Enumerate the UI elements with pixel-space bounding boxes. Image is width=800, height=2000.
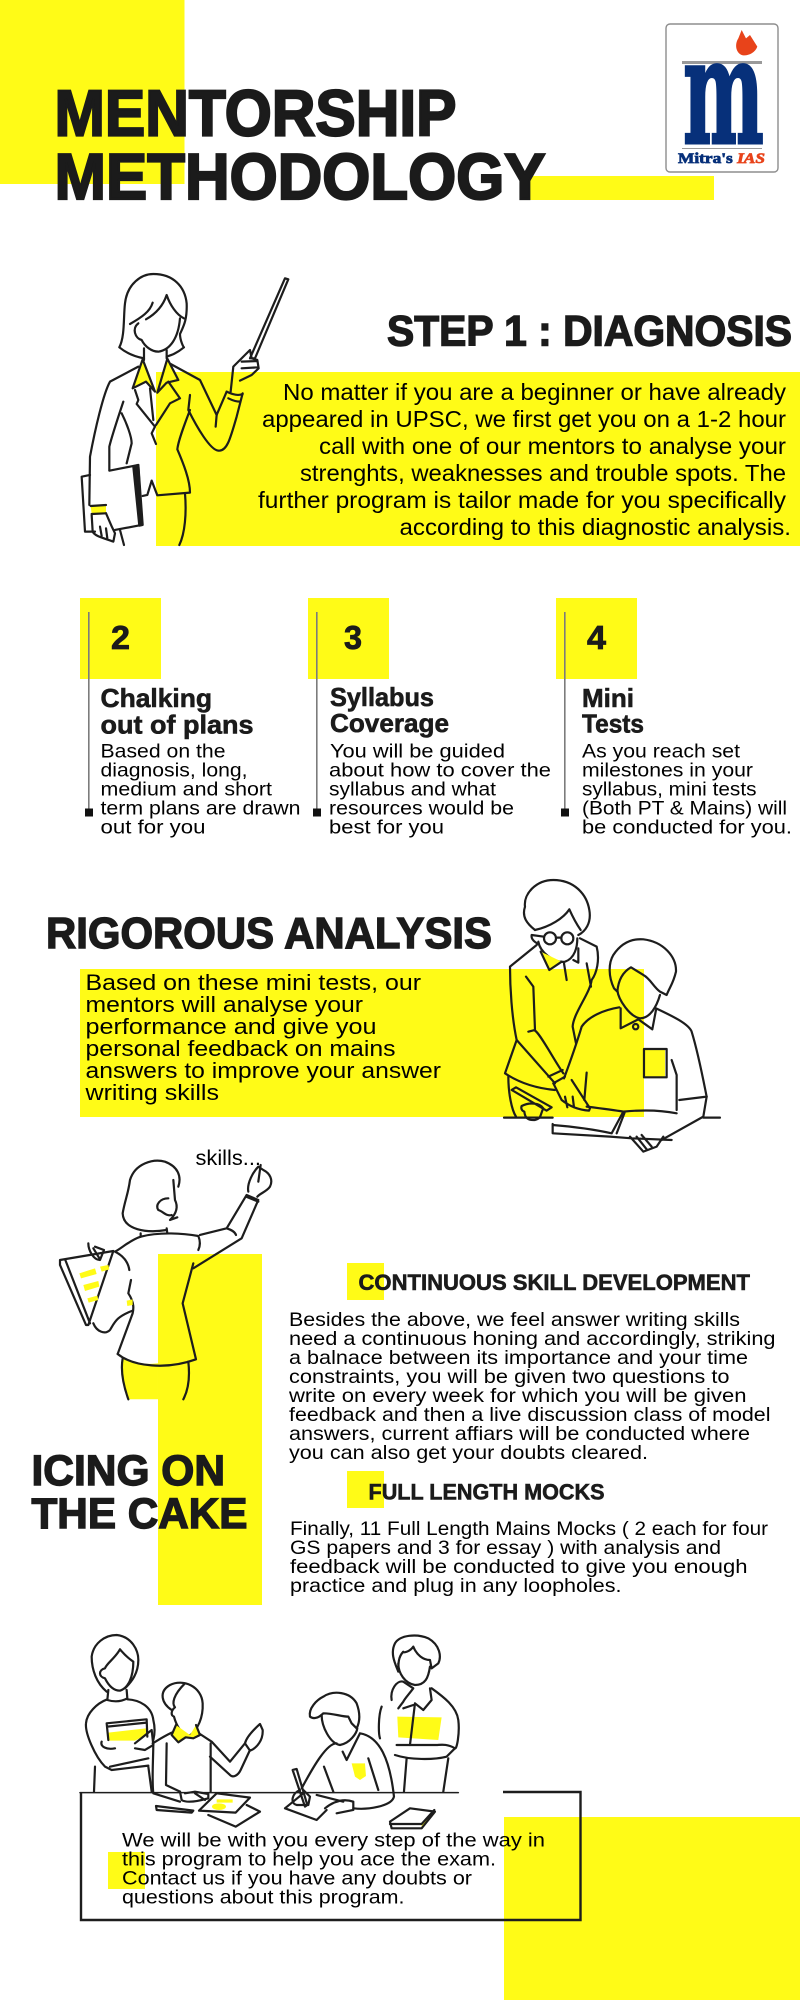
text block: step 3 description (329, 740, 551, 838)
text block: diagnosis description: appeared in UPSC, we first get you on a 1-2 hour (262, 406, 786, 432)
heading: mini tests: Tests (582, 708, 644, 738)
text block: step 2 description: term plans are drawn (100, 798, 300, 820)
title: mentorship methodology: METHODOLOGY (54, 140, 546, 213)
heading: chalking out of plans: out of plans (100, 710, 254, 740)
text block: step 2 description: diagnosis, long, (100, 760, 248, 782)
text block: step 3 description: syllabus and what (329, 778, 497, 800)
text block: step 3 description: You will be guided (330, 740, 505, 762)
text block: closing message: Contact us if you have any doubts or (122, 1868, 473, 1890)
text block: diagnosis description: call with one of our mentors to analyse your (319, 433, 786, 459)
heading: mini tests (582, 683, 644, 738)
text block: step 3 description: resources would be (329, 798, 514, 820)
panel: step 4 mini tests (556, 598, 792, 838)
heading accent and title (347, 1263, 750, 1300)
text block: skill development description: write on every week for which you will be given (288, 1385, 746, 1407)
text block: analysis description: personal feedback on mains (86, 1036, 396, 1061)
yellow corner block (504, 1817, 800, 2000)
text block: step 4 description: As you reach set (582, 740, 741, 762)
text block: skill development description: answers, current affiars will be conducted where (289, 1423, 750, 1445)
heading: icing on the cake (32, 1447, 248, 1538)
label: skills: skills... (196, 1147, 261, 1170)
text block: closing message (122, 1830, 545, 1908)
text block: step 3 description: about how to cover the (329, 760, 551, 782)
heading: rigorous analysis: RIGOROUS ANALYSIS (46, 909, 492, 958)
panel: icing on the cake (32, 1147, 776, 1605)
text block: mocks description: feedback will be conducted to give you enough (290, 1556, 748, 1578)
heading: chalking out of plans: Chalking (100, 683, 212, 713)
panel: rigorous analysis (46, 880, 720, 1152)
timeline marker (313, 612, 321, 816)
section: continuous skill development (288, 1263, 776, 1464)
text block: skill development description: constraints, you will be given two questions to (289, 1366, 730, 1388)
text block: skill development description: a balnace between its importance and your time (289, 1347, 748, 1369)
heading accent and title: FULL LENGTH MOCKS (368, 1480, 604, 1504)
text block: skill development description: Besides the above, we feel answer writing skills (289, 1309, 740, 1331)
heading: syllabus coverage: Syllabus (330, 682, 434, 712)
yellow text accent (108, 1852, 145, 1889)
heading: syllabus coverage: Coverage (330, 708, 449, 738)
number badge 4: 4 (587, 619, 607, 656)
logo: Mitra's IAS: m (683, 5, 764, 178)
outlined text box (81, 1792, 580, 1920)
text block: step 3 description: best for you (329, 816, 444, 838)
heading accent and title: CONTINUOUS SKILL DEVELOPMENT (358, 1270, 750, 1295)
heading: syllabus coverage (330, 682, 449, 738)
text block: closing message: questions about this program. (122, 1886, 404, 1908)
heading: icing on the cake: THE CAKE (32, 1490, 248, 1538)
timeline marker (561, 612, 569, 816)
text block: step 4 description: milestones in your (582, 760, 754, 782)
text block: step 2 description: Based on the (100, 740, 226, 762)
text block: diagnosis description: strenghts, weaknesses and trouble spots. The (300, 460, 786, 486)
number badge 3: 3 (344, 619, 362, 656)
text block: analysis description: writing skills (84, 1080, 219, 1105)
text block: mocks description: Finally, 11 Full Length Mains Mocks ( 2 each for four (290, 1518, 769, 1540)
text block: analysis description: performance and give you (86, 1014, 376, 1039)
text block: step 4 description: (Both PT & Mains) will (582, 798, 787, 820)
text block: diagnosis description (258, 379, 791, 540)
text block: skill development description (288, 1309, 776, 1464)
yellow column background (158, 1254, 262, 1605)
heading: mini tests: Mini (582, 683, 634, 713)
panel: closing message (80, 1635, 800, 2000)
text block: diagnosis description: No matter if you are a beginner or have already (283, 379, 786, 405)
text block: mocks description: GS papers and 3 for essay ) with analysis and (290, 1537, 721, 1559)
heading: chalking out of plans (100, 683, 254, 740)
number badge 4 (556, 598, 637, 679)
heading accent and title (347, 1471, 604, 1508)
text block: diagnosis description: further program is tailor made for you specifically (258, 487, 786, 513)
timeline marker (85, 612, 93, 816)
title block with yellow accents (0, 0, 714, 213)
section: full length mocks (290, 1471, 769, 1597)
text block: step 4 description (582, 740, 792, 838)
number badge 2: 2 (111, 619, 130, 656)
text block: step 2 description: medium and short (100, 778, 273, 800)
text block: analysis description: Based on these mini tests, our (86, 970, 421, 995)
text block: skill development description: feedback and then a live discussion class of model (289, 1404, 770, 1426)
yellow panel background (156, 372, 800, 546)
yellow panel background (80, 969, 644, 1117)
panel: step 3 syllabus coverage (308, 598, 551, 838)
icon: woman writing on board (60, 1161, 271, 1399)
text block: analysis description (84, 970, 441, 1105)
text block: closing message: this program to help you ace the exam. (122, 1848, 496, 1870)
panel: step 2 chalking out of plans (80, 598, 300, 838)
icon: mentor guiding student (504, 880, 720, 1152)
heading: icing on the cake: ICING ON (32, 1447, 225, 1495)
panel: step 1 diagnosis (82, 274, 800, 546)
illustration: study group at a table (80, 1635, 459, 1828)
text block: step 2 description: out for you (100, 816, 206, 838)
text block: step 4 description: be conducted for you. (582, 816, 792, 838)
text block: step 2 description (100, 740, 300, 838)
title: mentorship methodology (54, 76, 546, 213)
text block: step 4 description: syllabus, mini tests (582, 778, 757, 800)
number badge 2 (80, 598, 161, 679)
text block: mocks description: practice and plug in any loopholes. (290, 1575, 622, 1597)
text block: analysis description: mentors will analyse your (86, 992, 363, 1017)
icon: teacher with pointer (82, 274, 288, 545)
text block: mocks description (290, 1518, 769, 1597)
text block: skill development description: you can also get your doubts cleared. (289, 1442, 648, 1464)
text block: closing message: We will be with you every step of the way in (122, 1830, 545, 1852)
number badge 3 (308, 598, 389, 679)
title: mentorship methodology: MENTORSHIP (54, 76, 456, 150)
text block: skill development description: need a continuous honing and accordingly, striking (289, 1328, 776, 1350)
text block: diagnosis description: according to this diagnostic analysis. (400, 514, 791, 540)
text block: analysis description: answers to improve your answer (86, 1058, 441, 1083)
logo: Mitra's IAS: Mitra's IAS (678, 151, 765, 167)
